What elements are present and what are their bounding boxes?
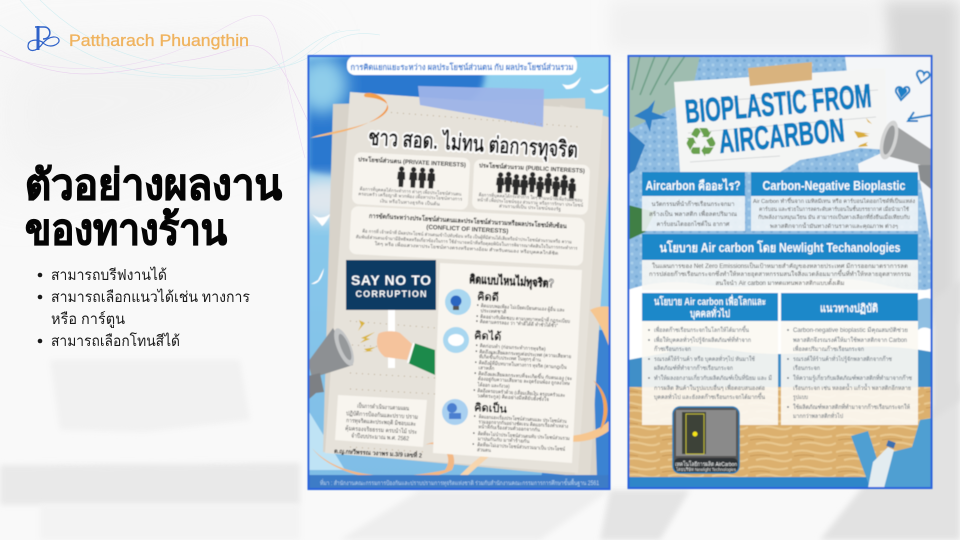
panel: practical approach: Carbon-negative bioplastic มีคุณสมบัติช่วย [793, 326, 908, 334]
card: public interests: หน้าที่ เพื่อประโยชน์ของ ส่วนรวม หรือการรักษา ประโยชน์ [477, 196, 584, 208]
section: think wise: คิดที่จะไม่นำประโยชน์ส่วนตนทับ ประโยชน์ส่วนรวม [478, 430, 570, 442]
panel: carbon-negative bioplastic: Carbon-Negative Bioplastic [762, 179, 906, 193]
title: AIRCARBON [717, 111, 846, 160]
note card: เป็นการดำเนินงานตามแผน [357, 401, 409, 412]
note card: การทุจริตและประพฤติ มิชอบและ [346, 417, 416, 428]
section: think able: วงศ์ตระกูล) คิดอย่างมีสติยับยั้งชั่งใจ [477, 390, 549, 403]
section: think good: คิดตามครรลอง ว่า "ทำดีได้ดี ทำชั่วได้ชั่ว" [480, 318, 558, 329]
panel: what is aircarbon: สร้างเป็น พลาสติก เพื่อลดปริมาณ [649, 209, 737, 218]
title pill [347, 56, 577, 75]
panel: practical approach: เพื่อลดปริมาณก๊าซเรือนกระจก [793, 345, 864, 353]
panel: policy for world and people: เพื่อให้บุคคลทั่วๆไปรู้จักผลิตภัณฑ์ที่ทำจาก [654, 336, 751, 344]
icon: P monogram [28, 26, 59, 51]
panel: policy for world and people: ก๊าซเรือนกระจก [654, 345, 691, 353]
sign: say no to corruption: CORRUPTION [356, 289, 426, 299]
section: think good: คิดอย่างรับผิดชอบ ตามบทบาทหน้าที่ กฎระเบียบ [480, 313, 570, 325]
sand [628, 387, 932, 477]
section: think wise: รวมออกจากกันอย่างชัดเจน คิดแยกเรื่องทำเหล่าง [478, 418, 569, 430]
icon: plastic bottle and bag [851, 418, 932, 488]
panel: poster on corruption [290, 56, 612, 489]
main heading [25, 161, 282, 253]
panel: practical approach: ให้ความรู้เกี่ยวกับผลิตภัณฑ์พลาสติกที่ทำมาจากก๊าซ [793, 374, 912, 382]
card: conflict of interests [349, 206, 585, 266]
section: think wise: มาปนกันกับ มาทำร้ายกัน [477, 435, 530, 445]
icon: lightning sparks [854, 118, 872, 147]
section: think wise [472, 401, 570, 452]
panel: carbon-negative bioplastic: พลาสติกจากน้ำมันทางด้านราคาและคุณภาพ ต่างๆ [770, 222, 898, 230]
panel: carbon-negative bioplastic: คาร์บอน และช่วยในการลดระดับคาร์บอนในชั้นบรรยากาศ เมื่อนำมาใช้ [759, 205, 909, 213]
paper heading [367, 127, 579, 163]
card: conflict of interests: ใดๆ หรือ เพื่อแสวงหาประโยชน์ทางตรงหรือทางอ้อม สำหรับตนเอง หรือบุคคลใกล้ชิด [374, 240, 558, 257]
panel: practical approach: แนวทางปฏิบัติ [820, 302, 878, 315]
sign: say no to corruption: SAY NO TO [351, 272, 431, 288]
note card [335, 395, 427, 447]
icon: hearts and arrow doodles [896, 71, 932, 121]
section: think able [471, 328, 575, 404]
section: think able: คิดถึงผู้ที่มีบทบาทในทางการ ทุจริต (ตามกฎเป็น [479, 358, 567, 371]
panel: what is aircarbon: คาร์บอนไดออกไซด์ใน อากาศ [656, 220, 730, 228]
textured blue backdrop [628, 56, 932, 290]
main heading: ของทางร้าน [25, 206, 227, 253]
panel: bioplastic poster [628, 56, 932, 488]
card: conflict of interests: สัมพันธ์ส่วนตนเข้ามามีอิทธิพลหรือเกี่ยวข้องในการ ใช้อำนาจหน้าที่หรือดุลยพินิจในการพิจารณาตัดสินใจในการกระทำการ [356, 233, 578, 252]
section: think wise: คิดที่จะไม่เอาประโยชน์ส่วนรวมมาเป็น ประโยชน์ [477, 440, 566, 453]
bullet list: หรือ การ์ตูน [51, 311, 125, 328]
panel: what is aircarbon [642, 172, 745, 231]
title [684, 83, 872, 154]
note card: จำปีงบประมาณ พ.ศ. 2562 [351, 431, 410, 443]
photo: aircarbon plant [673, 407, 739, 473]
panel: policy for world and people: รณรงค์ให้ร้านค้า หรือ บุคคลทั่วๆไป หันมาใช้ [654, 355, 755, 363]
panel: what is aircarbon: Aircarbon คืออะไร? [646, 178, 740, 193]
section: think able: คิดถึงผลเสียผลกระทบที่จะเกิดขึ้น กับตนเอง (จะ [478, 368, 573, 382]
panel: practical approach: เรือนกระจก เช่น หลอดน้ำ แก้วน้ำ พลาสติกอีกหลาย [793, 382, 911, 392]
tape [748, 62, 812, 86]
section: think wise: ส่วนตน [477, 447, 492, 454]
paper heading: ชาว สอด. ไม่ทน ต่อการทุจริต [367, 124, 579, 164]
section: think able: ต้องอยู่กับความเสียหาย ละอุดร้อนพ้อง ถูกลงโทษ [478, 375, 571, 387]
panel: policy for world and people: บุคคลทั่วไป [690, 306, 730, 320]
birds [311, 77, 609, 284]
panel: newlight policy: นโยบาย Air carbon โดย Newlight Techanologies [660, 240, 901, 255]
swoosh [310, 93, 388, 138]
icon: recycle symbol: ♻ [686, 127, 716, 160]
icon: speech cloud [443, 327, 469, 353]
note paper [674, 70, 857, 173]
main paper [325, 92, 603, 473]
section: think good: คิดดี [477, 290, 499, 304]
section: think able: คิดถึงผลเสียผลกระทบต่อประเทศ (ความเสียหาย [479, 348, 571, 360]
card: private interests: เงิน หรือในทางธุรกิจ เป็นต้น [380, 196, 441, 208]
panel: thinking card: คิดแบบไหนไม่ทุจริต? [469, 271, 555, 291]
section: think able: คิดได้ [474, 328, 502, 343]
section: think able: เสาหลัก [478, 365, 495, 372]
photo: aircarbon plant: โดยบริษัท Newlight Technologies [676, 466, 737, 472]
logo [28, 26, 249, 51]
section: think able: คิดถึงครอบครัวด้วย (เสื่อมเสียเงิน ครอบครัวและ [477, 387, 566, 399]
section: think wise: คิดเป็น [474, 400, 508, 416]
dotted guides [350, 112, 580, 452]
section: think wise: หน้าที่กับเรื่องส่วนตัวออกจากกัน [478, 423, 541, 434]
tape [418, 86, 544, 127]
card: private interests: ครอบครัว เครือญาติ พวกพ้อง เพื่อหาประโยชน์ทางการ [358, 190, 463, 203]
bullet list [38, 266, 250, 350]
panel: practical approach: รูปแบบ [793, 394, 808, 401]
panel: policy for world and people: เพื่อลดก๊าซเรือนกระจกในโลกให้ได้มากขึ้น [654, 324, 749, 334]
section: think good: ประเทศชาติ [480, 307, 507, 316]
footer strip [308, 475, 610, 489]
card: public interests: ส่วนรวมที่เป็น ประโยชน์ของรัฐ [499, 201, 562, 213]
card: public interests [472, 159, 590, 215]
panel: policy for world and people: บุคคลทั่วไป และยังลดก๊าซเรือนกระจกได้มากขึ้น [654, 391, 765, 401]
panel: practical approach: พลาสติกจึงรณรงค์ให้มาใช้พลาสติกจาก Carbon [793, 336, 907, 344]
photo: aircarbon plant: เทคโนโลยีการผลิต AirCarbon [675, 460, 737, 468]
panel: thinking card [433, 263, 582, 463]
icon: megaphone [308, 328, 354, 399]
main heading: ตัวอย่างผลงาน [25, 161, 282, 208]
panel: practical approach: มากกว่าพลาสติกทั่วไป [793, 412, 843, 420]
section: think able: ได้ออก และกังวล) [477, 381, 510, 390]
note card: คุ้มครองจริยธรรม ครบนำไม้ ประ [345, 424, 417, 436]
panel: policy for world and people [642, 293, 778, 425]
panel: newlight policy [642, 234, 918, 290]
card: public interests: ประโยชน์ส่วนรวม (PUBLIC INTERESTS) [479, 161, 585, 175]
panel: practical approach [781, 293, 918, 425]
back paper [323, 98, 597, 478]
card: private interests: ประโยชน์ส่วนตน (PRIVATE INTERESTS) [358, 155, 466, 169]
paper heading: ชาว สอด. ไม่ทน ต่อการทุจริต [367, 124, 579, 164]
panel: policy for world and people: นโยบาย Air carbon เพื่อโลกและ [654, 294, 766, 308]
panel: poster on corruption: การคิดแยกแยะระหว่าง ผลประโยชน์ส่วนตน กับ ผลประโยชน์ส่วนรวม [350, 62, 574, 72]
panel: practical approach: รณรงค์ให้ร้านค้าทั่วไปรู้จักพลาสติกจากก๊าซ [793, 355, 892, 363]
section: think wise: คิดแยกแยะเรื่องประโยชน์ส่วนตนและ ประโยชน์ส่วน [479, 413, 567, 425]
card: private interests: คือการที่บุคคลได้กระทำการ ต่างๆ เพื่อประโยชน์ส่วนตน [359, 185, 462, 198]
panel: what is aircarbon: นวัตกรรมที่นำก๊าซเรือนกระจกมา [652, 200, 734, 208]
sign: say no to corruption [346, 260, 436, 368]
panel: carbon-negative bioplastic: กับพลังงานหมุนเวียน มัน สามารถเป็นทางเลือกที่ยั่งยืนเมื่อเทียบกับ [758, 213, 910, 221]
icon: light bulb [445, 289, 471, 315]
panel: policy for world and people: ทำให้ผลงอกงามเกี่ยวกับผลิตภัณฑ์เป็นที่นิยม และ มี [654, 373, 772, 382]
footer strip: ที่มา : สำนักงานคณะกรรมการป้องกันและปราบปรามการทุจริตแห่งชาติ ร่วมกับสำนักงานคณะกรรมการการศึกษาขั้นพื้นฐาน 2561 [320, 477, 600, 487]
card: public interests: คือการที่บุคคลได้กระทำการ ใดๆ ตามหน้าที่เพื่อรับผิดชอบ [478, 191, 583, 204]
icon: thinking puzzle [442, 399, 468, 425]
card: conflict of interests: คือ การที่ เจ้าหน้าที่ มีผลประโยชน์ ส่วนตนเข้าไปทับซ้อน หรือ เป็นผู้ที่มีส่วนได้เสียหรือนำประโยชน์ส่วนรวมหรือ ความ [362, 227, 572, 245]
card: conflict of interests: (CONFLICT OF INTERESTS) [426, 224, 509, 235]
panel: practical approach: ใช้ผลิตภัณฑ์พลาสติกที่ทำมาจากก๊าซเรือนกระจกให้ [793, 403, 910, 411]
icon: lightning sparks [358, 320, 376, 352]
decorative wave lines [0, 0, 380, 158]
panel: carbon-negative bioplastic [751, 172, 918, 231]
lower water and clouds [630, 300, 930, 354]
author credit: ด.ญ.กษวีพรรณ วงาพร ม.3/9 เลขที่ 2 [334, 446, 423, 460]
panel: carbon-negative bioplastic: Air Carbon ทำขึ้นจาก เมทิลมีเทน หรือ คาร์บอนไดออกไซด์ที่เป็นแหล่ง [753, 197, 915, 205]
panel: policy for world and people: ผลิตภัณฑ์ที่ทำจากก๊าซเรือนกระจก [654, 364, 733, 372]
panel: newlight policy: การปล่อยก๊าซเรือนกระจกซึ่งทำให้หลายอุตสาหกรรมสนใจสิ่งแวดล้อมมากขึ้นที่ทำให้หลายอุตสาหกรรม [649, 268, 911, 278]
icon: megaphone [876, 119, 932, 190]
panel: newlight policy: สนใจนำ Air carbon มาทดแทนพลาสติกแบบดั้งเดิม [716, 277, 845, 287]
note card: ปฏิบัติการป้องกันและปราบ ปราม [346, 410, 418, 421]
dark sky blob [308, 56, 484, 175]
bullet list: สามารถเลือกโทนสีได้ [51, 332, 180, 350]
section: think able: คิดก่อนทำ (ก่อนกระทำการทุจริต) [479, 342, 546, 353]
bullet list: สามารถบรีฟงานได้ [51, 266, 167, 284]
icon: hand holding sign [377, 331, 435, 375]
panel: policy for world and people: การผลิต สินค้าในรูปแบบอื่นๆ เพื่อตอบสนองต่อ [654, 384, 765, 392]
bullet list: สามารถเลือกแนวได้เช่น ทางการ [51, 288, 250, 306]
section: think able: ที่เกิดขึ้นกับประเทศ ในทุกๆ ด้าน [479, 351, 542, 364]
panel: practical approach: เรือนกระจก [793, 364, 820, 372]
section: think good: คิดแบบพอเพียง ไม่เบียดเบียนตนเอง ผู้อื่น และ [481, 302, 565, 314]
panel: newlight policy: ในแผนการของ Net Zero Emissionsเป็นเป้าหมายสำคัญของหลายประเทศ มีการออกมาตราการลด [652, 261, 908, 270]
card: private interests [352, 152, 470, 210]
brand name: Pattharach Phuangthin [69, 32, 249, 50]
card: conflict of interests: การขัดกันระหว่างประโยชน์ส่วนตนและประโยชน์ส่วนรวมหรือผลประโยชน์ทับซ้อน [369, 211, 568, 230]
section: think good [476, 290, 571, 330]
